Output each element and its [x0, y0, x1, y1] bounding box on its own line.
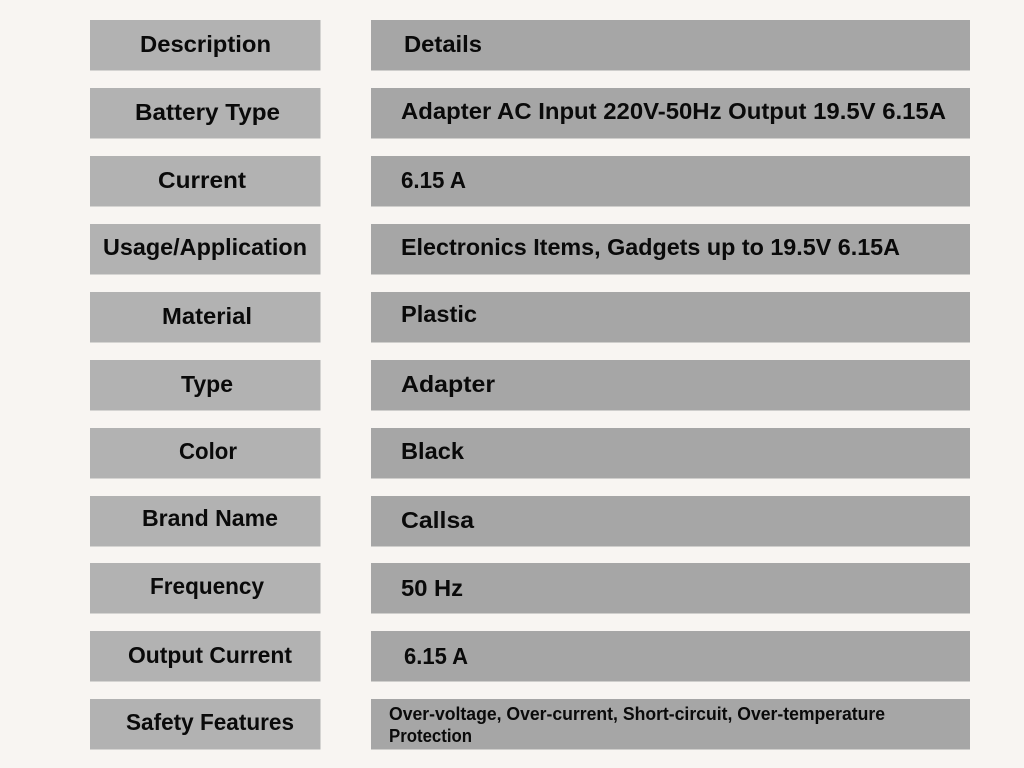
row: type: Type — [181, 371, 233, 397]
row: current: 6.15 A — [401, 167, 466, 193]
row: usage/application — [90, 224, 970, 274]
row: current: Current — [158, 167, 246, 193]
row: output current — [90, 631, 970, 682]
row: brand name: Brand Name — [142, 505, 278, 531]
row: current — [90, 156, 970, 206]
row: safety features: Safety Features — [126, 709, 294, 735]
row: battery type: Adapter AC Input 220V-50Hz Output 19.5V 6.15A — [401, 98, 946, 124]
row: type — [90, 360, 970, 410]
row: output current: Output Current — [128, 642, 292, 668]
row: material: Material — [162, 303, 252, 329]
row: material: Plastic — [401, 301, 477, 327]
row: brand name — [90, 496, 970, 546]
row: safety features: Protection — [389, 726, 472, 746]
row: header — [90, 20, 970, 70]
row: header: Details — [404, 31, 482, 57]
row: material — [90, 292, 970, 342]
row: usage/application: Electronics Items, Gadgets up to 19.5V 6.15A — [401, 234, 900, 260]
row: brand name: Callsa — [401, 507, 474, 533]
row: color: Color — [179, 438, 237, 464]
row: battery type — [90, 88, 970, 138]
row: frequency: Frequency — [150, 573, 264, 599]
row: usage/application: Usage/Application — [103, 234, 307, 260]
row: frequency — [90, 563, 970, 614]
row: safety features: Over-voltage, Over-current, Short-circuit, Over-temperature — [389, 704, 885, 724]
row: color: Black — [401, 438, 464, 464]
row: frequency: 50 Hz — [401, 575, 463, 601]
row: output current: 6.15 A — [404, 643, 468, 669]
row: safety features — [90, 699, 970, 750]
row: color — [90, 428, 970, 478]
row: type: Adapter — [401, 371, 495, 397]
row: header: Description — [140, 31, 271, 57]
row: battery type: Battery Type — [135, 99, 280, 125]
